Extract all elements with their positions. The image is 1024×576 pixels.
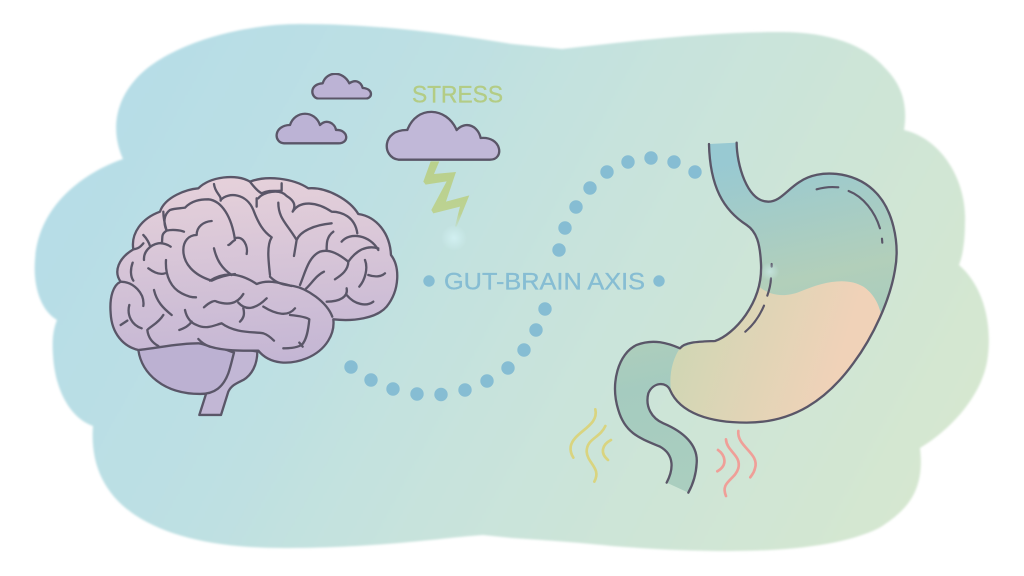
highlight glow <box>761 262 779 281</box>
icon: large storm cloud <box>387 112 499 160</box>
icon: small left cloud <box>277 114 346 143</box>
bolt glow <box>441 225 467 251</box>
dotted connection path <box>344 151 702 401</box>
stomach outline <box>615 143 897 493</box>
icon: small top cloud <box>312 74 371 99</box>
cerebrum <box>110 177 397 363</box>
icon: yellow gas squiggles <box>571 409 611 482</box>
cerebellum <box>138 340 234 394</box>
icon: stomach <box>615 143 897 493</box>
label: stress: STRESS <box>412 82 503 108</box>
stomach fill <box>615 143 897 493</box>
icon: red gas squiggles <box>717 431 756 496</box>
icon: lightning bolt <box>423 161 469 227</box>
gyri folds <box>214 182 282 201</box>
label: gut-brain axis: GUT-BRAIN AXIS <box>444 268 645 296</box>
acid contents <box>670 281 881 422</box>
icon: brain <box>110 177 397 415</box>
highlight strokes <box>745 187 882 332</box>
brain stem and pons <box>199 347 257 415</box>
